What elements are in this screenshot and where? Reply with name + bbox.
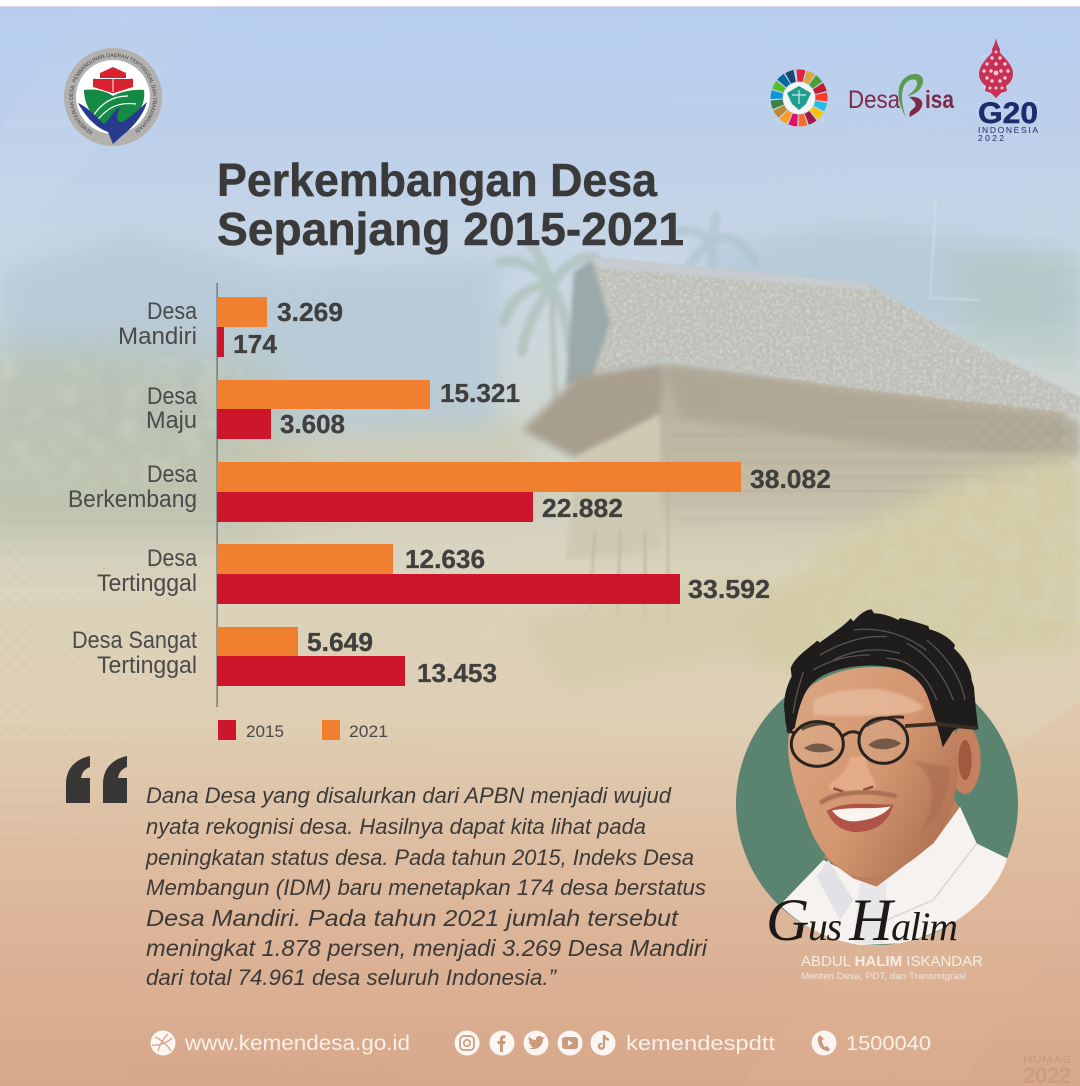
- G20 wordmark: G20: [978, 97, 1038, 130]
- portrait eyes: [804, 739, 901, 752]
- logo: Desa Bisa: Desa: [848, 86, 900, 114]
- social handle: kemendespdtt: [626, 1033, 776, 1055]
- portrait role: Menteri Desa, PDT, dan Transmigrasi: [801, 971, 966, 982]
- row: Desa Berkembang: Berkembang: [68, 486, 197, 513]
- row: Desa Sangat Tertinggal: Tertinggal: [97, 652, 197, 679]
- row: Desa Mandiri: 3.269: [277, 297, 343, 327]
- quote text: dari total 74.961 desa seluruh Indonesia.”: [146, 965, 558, 990]
- title: Perkembangan Desa: [217, 154, 657, 206]
- portrait mouth: [827, 804, 893, 832]
- icon: phone: [812, 1030, 836, 1056]
- logo blue hands: [78, 102, 147, 144]
- row: Desa Mandiri: 174: [233, 329, 278, 359]
- row: Desa Berkembang: Desa: [147, 461, 198, 488]
- hut: [590, 366, 1075, 570]
- row: Desa Tertinggal: 33.592: [688, 574, 770, 604]
- row: Desa Sangat Tertinggal: 5.649: [307, 627, 373, 657]
- row: Desa Berkembang: [68, 461, 831, 523]
- row: Desa Sangat Tertinggal: [72, 627, 497, 688]
- row: Desa Maju: Desa: [147, 383, 198, 410]
- row: Desa Tertinggal: Desa: [147, 545, 198, 572]
- portrait eyebrows: [802, 717, 904, 729]
- portrait shirt: [780, 807, 1007, 945]
- icon: instagram: [454, 1030, 480, 1056]
- quote text: Desa Mandiri. Pada tahun 2021 jumlah tersebut: [146, 905, 680, 931]
- row: Desa Sangat Tertinggal: 13.453: [417, 658, 497, 688]
- chart legend: 2015: [246, 722, 284, 741]
- logo: G20 Indonesia: [978, 38, 1038, 143]
- portrait: Abdul Halim Iskandar: [736, 609, 1018, 945]
- quote text: [145, 783, 708, 990]
- quote text: peningkatan status desa. Pada tahun 2015, Indeks Desa: [145, 845, 694, 870]
- watermark: Humas 2022: HUMAS: [1023, 1054, 1071, 1066]
- row: Desa Maju: [146, 378, 520, 439]
- G20 red ornament: [979, 38, 1013, 98]
- row: Desa Maju: 3.608: [280, 409, 345, 439]
- icon: website: [150, 1030, 176, 1056]
- chart legend: [218, 720, 388, 741]
- icon: facebook: [490, 1030, 514, 1056]
- portrait glasses: [787, 718, 977, 766]
- logo green fields: [84, 89, 144, 124]
- title: [217, 154, 684, 255]
- row: Desa Mandiri: Desa: [147, 298, 198, 325]
- logo: Desa Bisa: isa: [925, 86, 955, 114]
- row: Desa Tertinggal: 12.636: [405, 544, 485, 574]
- quote text: Membangun (IDM) baru menetapkan 174 desa berstatus: [146, 875, 706, 900]
- portrait name: ABDUL HALIM ISKANDAR: [801, 954, 983, 970]
- G20 year: 2022: [978, 133, 1004, 143]
- row: Desa Tertinggal: Tertinggal: [97, 570, 197, 597]
- title: Sepanjang 2015-2021: [217, 203, 684, 255]
- icon: tiktok: [590, 1030, 616, 1056]
- G20 country: INDONESIA: [978, 125, 1038, 135]
- row: Desa Maju: 15.321: [440, 378, 520, 408]
- row: Desa Tertinggal: [97, 544, 770, 604]
- portrait hair: [784, 609, 978, 747]
- row: Desa Berkembang: 38.082: [750, 464, 831, 494]
- icon: twitter: [524, 1030, 548, 1056]
- portrait illustration: [780, 609, 1007, 945]
- quote text: nyata rekognisi desa. Hasilnya dapat kita lihat pada: [146, 814, 646, 839]
- portrait face: [788, 667, 958, 877]
- portrait green circle: [736, 663, 1018, 945]
- footer contacts: [150, 1030, 931, 1056]
- logo red roof: [93, 67, 133, 93]
- row: Desa Berkembang: 22.882: [542, 493, 623, 523]
- portrait ear: [949, 726, 981, 794]
- logo: SDG wheel: [767, 66, 831, 130]
- logo: Kementerian Desa: [64, 48, 162, 146]
- bar chart: [68, 283, 831, 707]
- quote text: meningkat 1.878 persen, menjadi 3.269 Desa Mandiri: [146, 935, 708, 961]
- logo ring text: KEMENTERIAN DESA, PEMBANGUNAN DAERAH TERTINGGAL DAN TRANSMIGRASI: [69, 53, 157, 134]
- icon: quotation mark: [66, 756, 127, 803]
- website url: www.kemendesa.go.id: [184, 1032, 410, 1055]
- row: Desa Mandiri: [118, 297, 343, 359]
- icon: youtube: [558, 1030, 582, 1056]
- phone number: 1500040: [846, 1033, 931, 1055]
- chart legend: 2021: [349, 722, 388, 741]
- row: Desa Mandiri: Mandiri: [118, 323, 197, 350]
- row: Desa Sangat Tertinggal: Desa Sangat: [72, 627, 197, 654]
- quote text: Dana Desa yang disalurkan dari APBN menjadi wujud: [146, 783, 672, 808]
- palm trees: [500, 216, 756, 410]
- row: Desa Maju: Maju: [146, 407, 197, 434]
- signature: Gus Halim: [766, 887, 958, 953]
- logo: Desa Bisa: [848, 74, 955, 118]
- portrait neck: [823, 767, 959, 887]
